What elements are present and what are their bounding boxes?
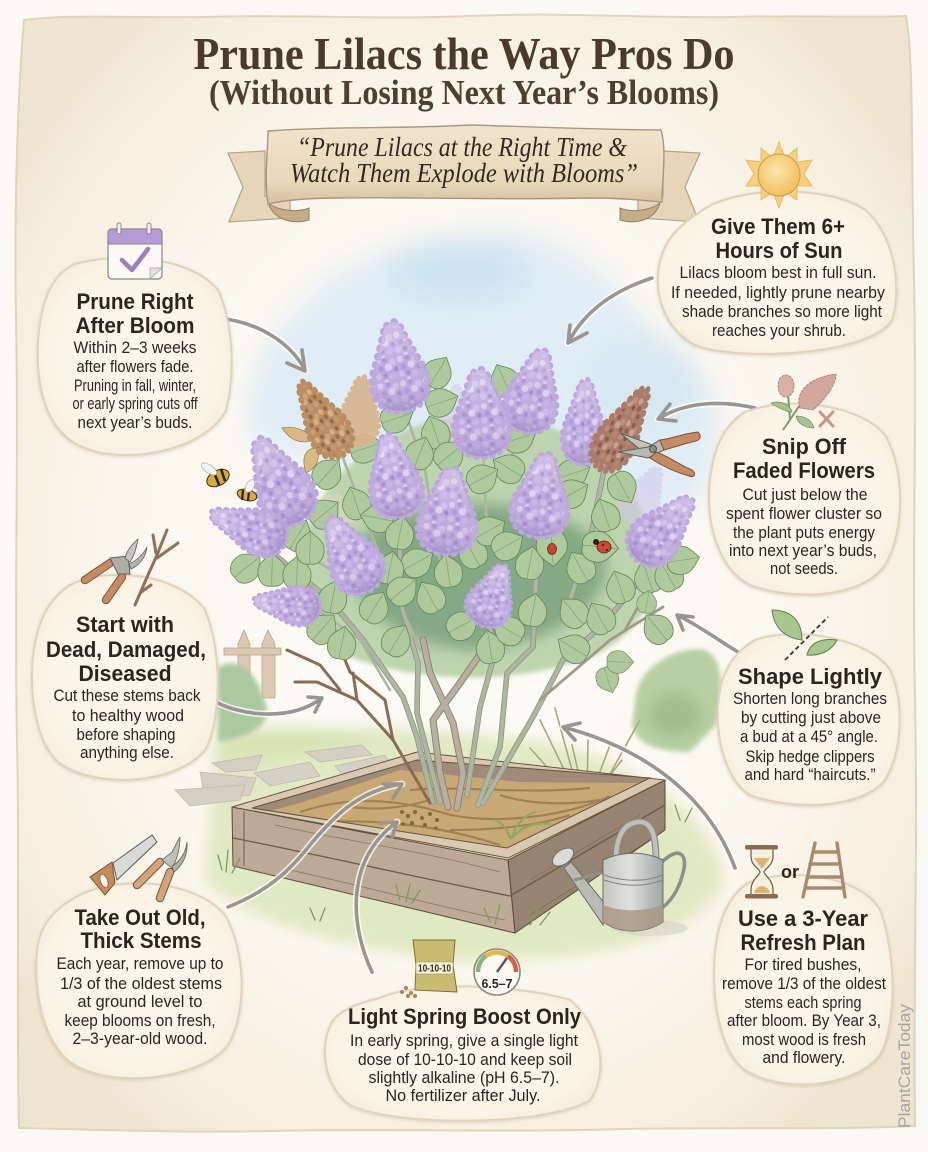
heading: Shape Lightly xyxy=(738,664,882,689)
body text: Skip hedge clippers xyxy=(746,748,874,766)
heading: Prune Right xyxy=(76,289,194,314)
body text: most wood is fresh xyxy=(742,1031,866,1049)
soil and mulch xyxy=(262,770,640,848)
body text: not seeds. xyxy=(770,560,838,578)
body text: In early spring, give a single light xyxy=(350,1032,578,1050)
heading xyxy=(711,214,845,263)
panel: start with dead damaged diseased xyxy=(32,530,218,780)
heading: Snip Off xyxy=(762,434,846,459)
ladybugs xyxy=(548,539,611,554)
body text: anything else. xyxy=(80,744,174,762)
body text xyxy=(56,955,224,1048)
icon: sun xyxy=(746,142,812,208)
arrow: sun to shrub xyxy=(568,278,652,343)
bed front face xyxy=(232,807,515,933)
banner quote: “Prune Lilacs at the Right Time & xyxy=(297,132,627,162)
title: Prune Lilacs the Way Pros Do xyxy=(194,29,734,79)
left shrub xyxy=(218,663,267,742)
body text: Within 2–3 weeks xyxy=(74,339,196,357)
heading: Thick Stems xyxy=(80,928,202,953)
body text: and hard “haircuts.” xyxy=(744,766,876,784)
lawn xyxy=(205,728,722,962)
weed sprout xyxy=(495,812,550,838)
fertilizer granules xyxy=(400,810,439,830)
body text: before shaping xyxy=(76,726,176,744)
bypass pruners on the spent bloom xyxy=(618,432,700,477)
fence xyxy=(224,630,281,700)
body text: Cut these stems back xyxy=(54,687,201,705)
body text: For tired bushes, xyxy=(744,956,862,974)
right shrub xyxy=(632,649,720,752)
body text: and flowery. xyxy=(762,1049,846,1067)
heading: After Bloom xyxy=(76,313,194,338)
icon: spent flower with x xyxy=(771,374,836,430)
thick grey trunks xyxy=(423,640,490,808)
body text: next year’s buds. xyxy=(78,414,192,432)
watering can xyxy=(549,822,688,936)
spent brown tan leaves xyxy=(282,427,318,473)
body text: after flowers fade. xyxy=(76,358,194,376)
body text xyxy=(350,1032,578,1105)
leaves xyxy=(225,350,702,697)
garden background: lawn, path, fence, shrub xyxy=(175,630,722,962)
watermark: PlantCareToday xyxy=(895,1003,914,1128)
body text: by cutting just above xyxy=(741,709,881,727)
heading xyxy=(46,612,206,686)
banner quote xyxy=(290,132,638,188)
body text xyxy=(72,339,198,432)
heading: Use a 3-Year xyxy=(738,906,868,931)
back foliage xyxy=(302,418,656,678)
body text: a bud at a 45° angle. xyxy=(740,728,878,746)
body text: Each year, remove up to xyxy=(56,955,224,973)
arrow: shape lightly to branch xyxy=(677,615,738,652)
banner quote: Watch Them Explode with Blooms” xyxy=(290,158,638,188)
heading: Faded Flowers xyxy=(733,458,875,483)
panel: prune right after bloom xyxy=(38,223,232,455)
body text: Lilacs bloom best in full sun. xyxy=(680,264,876,282)
body text xyxy=(671,264,886,340)
heading: Dead, Damaged, xyxy=(46,637,206,662)
bees xyxy=(199,461,258,503)
subtitle: (Without Losing Next Year’s Blooms) xyxy=(209,73,719,112)
panel: light spring boost xyxy=(325,940,600,1121)
dead brown branch xyxy=(287,650,430,803)
arrow: after bloom to spent flowers xyxy=(218,318,305,371)
heading: Light Spring Boost Only xyxy=(348,1004,581,1029)
body text: 2–3-year-old wood. xyxy=(72,1030,208,1048)
heading: Diseased xyxy=(78,661,172,686)
body text: Shorten long branches xyxy=(733,690,887,708)
body text: 1/3 of the oldest stems xyxy=(60,975,222,993)
heading xyxy=(738,906,868,955)
heading xyxy=(76,289,194,338)
grass tufts xyxy=(218,805,692,925)
icon: hourglass xyxy=(745,845,778,898)
stone path xyxy=(175,745,395,806)
heading: Refresh Plan xyxy=(740,930,866,955)
body text xyxy=(733,690,887,784)
body text xyxy=(722,956,886,1067)
stems xyxy=(275,405,663,808)
arrow: dead wood to branch xyxy=(212,697,322,714)
icon: saw and pruners xyxy=(90,835,187,898)
right bud twig xyxy=(540,600,663,700)
body text: reaches your shrub. xyxy=(712,322,846,340)
banner ribbon xyxy=(228,125,700,222)
arrow: old stems to base xyxy=(228,784,402,907)
icon: leaf with dashed cut line xyxy=(772,610,837,660)
body text: shade branches so more light xyxy=(682,303,882,321)
body text: or early spring cuts off xyxy=(72,395,198,413)
spent brown blooms xyxy=(284,373,382,465)
or label: or xyxy=(781,862,799,882)
purple lilac clusters xyxy=(204,319,708,632)
body text: after bloom. By Year 3, xyxy=(727,1012,881,1030)
ornamental dry stems xyxy=(530,708,640,793)
body text xyxy=(54,687,201,762)
body text: to healthy wood xyxy=(72,707,184,725)
heading: Start with xyxy=(76,612,174,637)
arrow: snip off to faded bloom xyxy=(658,403,755,421)
body text: into next year’s buds, xyxy=(729,542,877,560)
heading: Give Them 6+ xyxy=(711,214,845,239)
panel: shape lightly xyxy=(718,610,900,805)
lilac shrub illustration xyxy=(199,319,708,808)
bed rim xyxy=(232,752,665,858)
plank seams xyxy=(233,805,665,920)
faded back blossoms xyxy=(311,383,675,530)
icon: pH gauge: 6.5–7 xyxy=(482,976,512,991)
body text: If needed, lightly prune nearby xyxy=(671,284,886,302)
icon: pH gauge xyxy=(474,949,520,995)
bed interior wall xyxy=(252,760,650,848)
body text: keep blooms on fresh, xyxy=(64,1012,216,1030)
heading: Take Out Old, xyxy=(74,905,206,930)
body text: Cut just below the xyxy=(742,486,868,504)
body text: Pruning in fall, winter, xyxy=(74,377,196,395)
bed right face xyxy=(508,780,665,933)
icon: fertilizer bag: 10-10-10 xyxy=(418,964,451,974)
arrow: 3-year plan to stems xyxy=(563,723,735,868)
icon: calendar xyxy=(108,223,162,279)
body text: stems each spring xyxy=(744,994,862,1012)
panel: 3-year refresh plan xyxy=(714,843,892,1084)
icon: ladder xyxy=(803,843,845,897)
panel: give them sun xyxy=(658,142,896,354)
body text: the plant puts energy xyxy=(733,524,876,542)
body text: spent flower cluster so xyxy=(726,505,882,523)
body text: slightly alkaline (pH 6.5–7). xyxy=(368,1069,560,1087)
heading xyxy=(74,905,206,953)
body text: dose of 10-10-10 and keep soil xyxy=(358,1051,572,1069)
watercolor sky xyxy=(248,232,719,517)
body text xyxy=(726,486,882,578)
body text: No fertilizer after July. xyxy=(386,1087,540,1105)
panel: take out old thick stems xyxy=(36,835,242,1078)
icon: fertilizer bag xyxy=(400,940,457,998)
body text: at ground level to xyxy=(78,993,202,1011)
panel: snip off faded flowers xyxy=(709,374,900,595)
heading xyxy=(733,434,875,483)
arrow: fertilizer to granules xyxy=(356,822,397,972)
heading: Hours of Sun xyxy=(716,238,842,263)
raised wooden bed xyxy=(218,752,692,933)
body text: remove 1/3 of the oldest xyxy=(722,975,886,993)
icon: pruners and branch xyxy=(85,530,178,605)
